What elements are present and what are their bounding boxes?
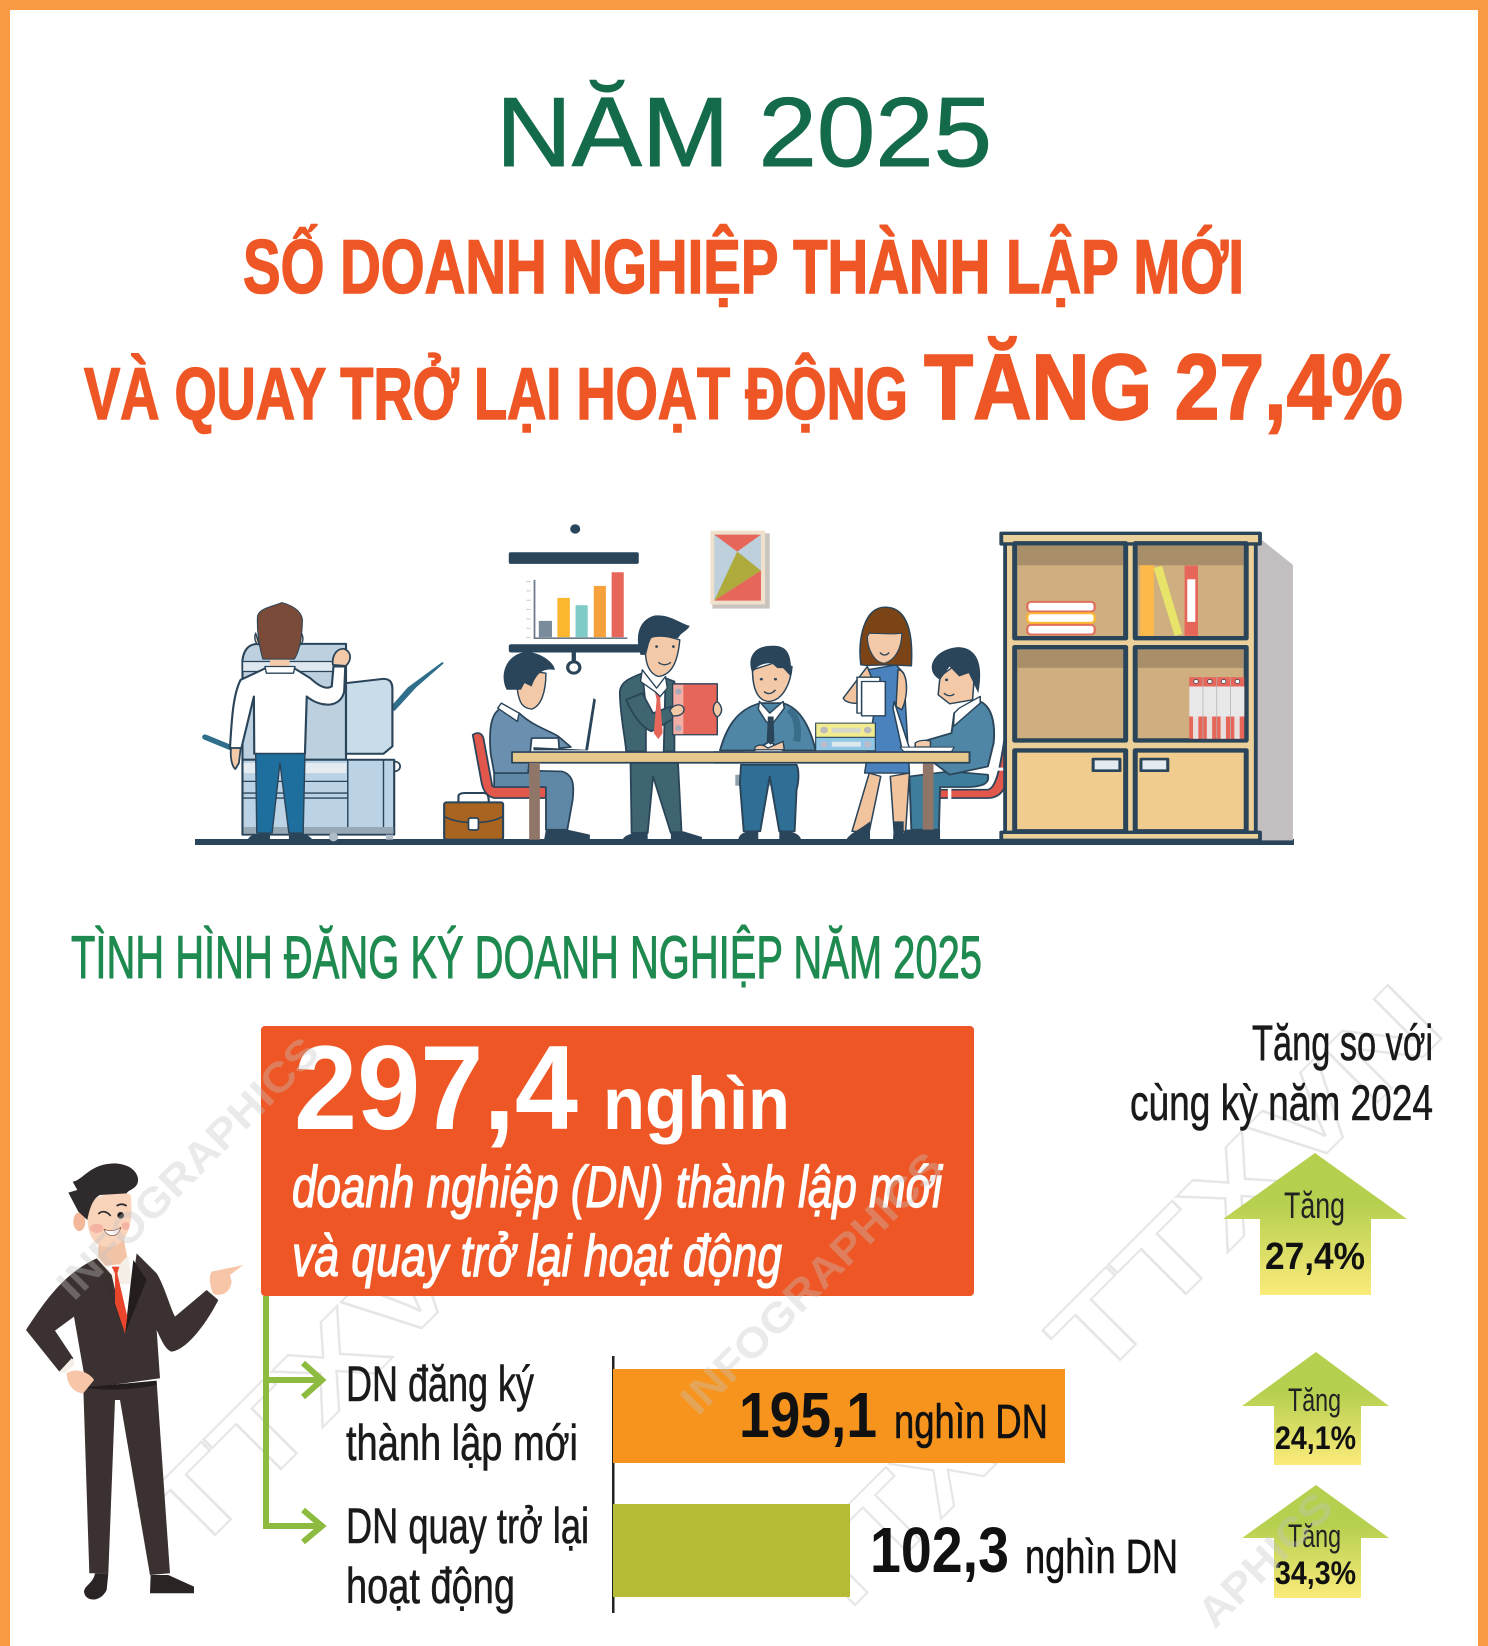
panel: total headline <box>261 1021 974 1296</box>
bar: returning businesses: nghìn DN <box>1025 1531 1178 1584</box>
bar: new registrations: 195,1 <box>739 1379 877 1451</box>
label: new registrations: thành lập mới <box>346 1415 578 1471</box>
arrow: new registrations increase: Tăng <box>1288 1382 1341 1418</box>
table, seated worker and standing man <box>444 615 744 840</box>
arrow: new registrations increase <box>1242 1352 1389 1465</box>
copier and worker <box>205 603 442 841</box>
total value: 297,4 <box>294 1021 578 1155</box>
text: INFOGRAPHICS <box>47 1028 328 1308</box>
illustration: man pointing <box>26 1163 243 1600</box>
text: TTXVN <box>120 1136 561 1577</box>
text: INFOGRAPHICS <box>671 1143 952 1423</box>
heading line 2: VÀ QUAY TRỞ LẠI HOẠT ĐỘNG <box>84 354 908 435</box>
text: APHICS <box>1188 1483 1342 1636</box>
total description: doanh nghiệp (DN) thành lập mới <box>292 1155 944 1220</box>
bar: new registrations <box>613 1369 1065 1463</box>
label: returning businesses: DN quay trở lại <box>346 1498 589 1554</box>
label: new registrations <box>346 1356 578 1471</box>
comparison heading <box>1130 1015 1433 1131</box>
total value <box>294 1021 790 1155</box>
centre man, woman, seated man and bookcase <box>714 533 1293 840</box>
label: returning businesses <box>346 1498 589 1614</box>
section heading: TÌNH HÌNH ĐĂNG KÝ DOANH NGHIỆP NĂM 2025 <box>71 924 982 991</box>
arrow: total increase: 27,4% <box>1265 1236 1365 1278</box>
total value: nghìn <box>603 1062 790 1145</box>
wall picture <box>710 531 770 609</box>
connector with arrows <box>266 1296 322 1542</box>
text: TTXVN <box>1025 961 1466 1402</box>
bar: returning businesses <box>613 1504 1178 1597</box>
arrow: returning businesses increase <box>1242 1485 1389 1598</box>
bookcase <box>1001 533 1293 840</box>
arrow: new registrations increase: 24,1% <box>1275 1420 1356 1456</box>
total description <box>292 1155 944 1289</box>
bar chart <box>612 1356 1178 1613</box>
heading line 2 <box>84 335 1403 439</box>
arrow: returning businesses increase: 34,3% <box>1275 1555 1356 1591</box>
title: year: NĂM 2025 <box>496 77 992 187</box>
bar: returning businesses: 102,3 <box>870 1514 1009 1586</box>
illustration: office scene <box>195 524 1294 845</box>
total description: và quay trở lại hoạt động <box>292 1224 782 1289</box>
presentation board with bar chart <box>509 524 641 673</box>
bar: new registrations: nghìn DN <box>894 1396 1048 1449</box>
text: TTX <box>765 1392 1015 1642</box>
arrow: total increase <box>1223 1153 1407 1295</box>
heading line 2: TĂNG 27,4% <box>924 335 1403 439</box>
arrow: total increase: Tăng <box>1284 1185 1345 1226</box>
arrow: returning businesses increase: Tăng <box>1288 1518 1341 1554</box>
label: returning businesses: hoạt động <box>346 1558 515 1614</box>
label: new registrations: DN đăng ký <box>346 1356 534 1412</box>
